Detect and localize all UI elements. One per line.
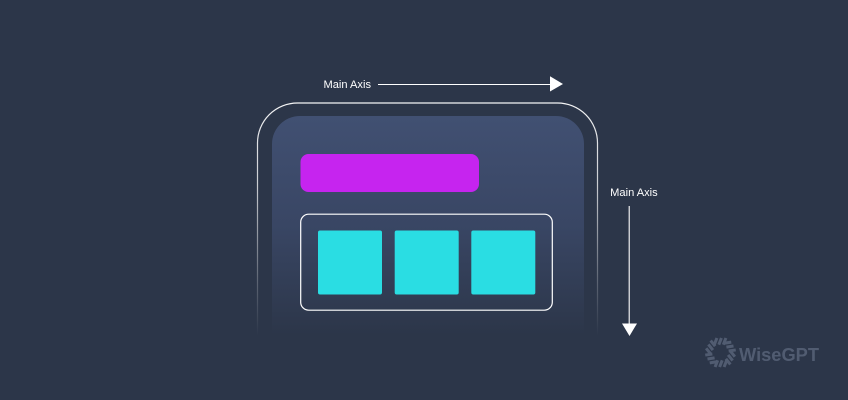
WiseGPT logo <box>705 338 820 367</box>
device inner panel <box>272 116 584 335</box>
row container <box>301 214 552 310</box>
device outer frame <box>258 103 598 338</box>
horizontal arrow <box>378 76 563 92</box>
vertical main axis label: Main Axis <box>610 187 658 199</box>
logo icon <box>705 338 736 367</box>
horizontal main axis label: Main Axis <box>324 79 371 91</box>
logo wordmark: WiseGPT <box>739 344 820 365</box>
cyan square 3 <box>471 230 535 294</box>
cyan square 2 <box>395 230 459 294</box>
magenta bar <box>300 154 479 192</box>
vertical arrow <box>622 206 637 336</box>
cyan square 1 <box>318 230 382 294</box>
